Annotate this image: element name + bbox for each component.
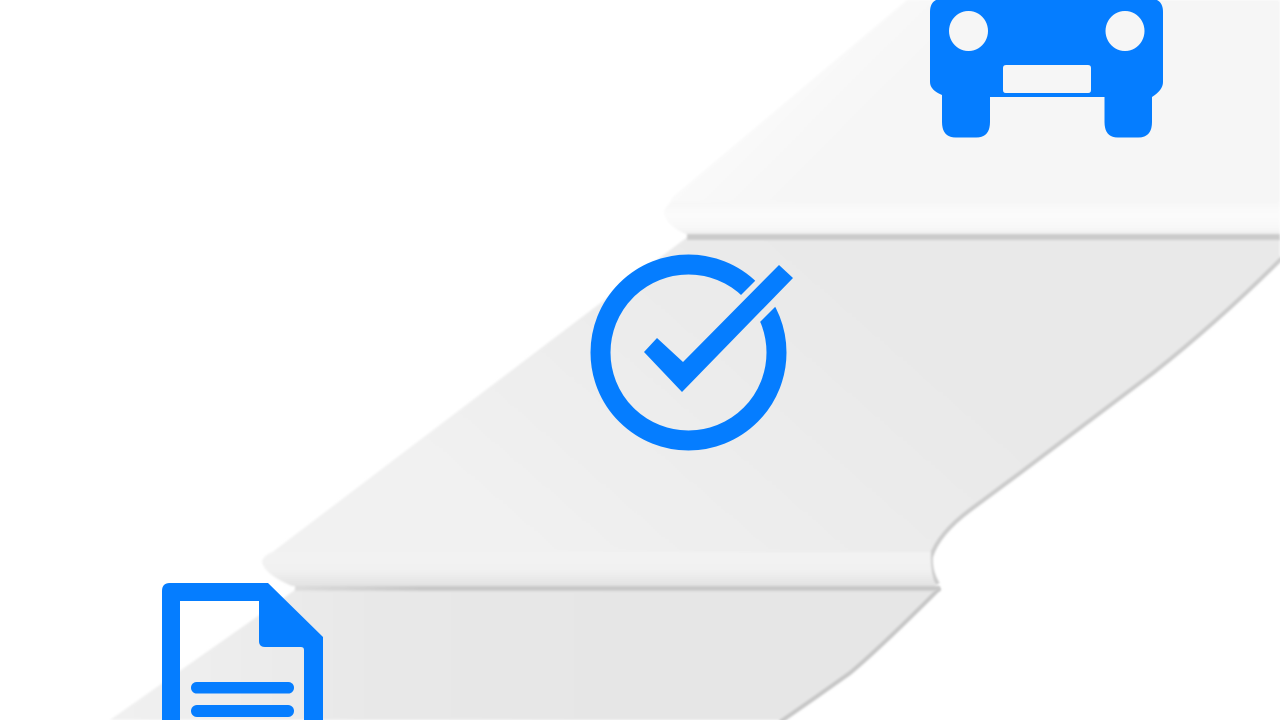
step 1: top band (664, 0, 1280, 240)
step 2 lip (262, 552, 936, 586)
icon: check mark in circle (600, 264, 793, 440)
icon: document (162, 583, 323, 720)
step 2 lip shadow (295, 586, 940, 591)
icon: car (930, 0, 1163, 138)
step 1 lip (664, 202, 1280, 234)
step 3: lower band (110, 588, 940, 720)
step 2: middle band (262, 238, 1280, 591)
step 1 lip shadow (687, 234, 1280, 240)
